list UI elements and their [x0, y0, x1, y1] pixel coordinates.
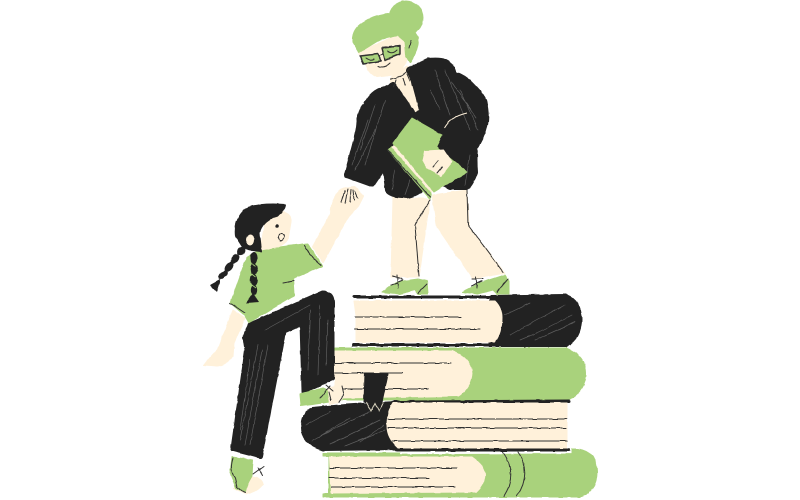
raised foot: [300, 385, 344, 406]
black jacket: [347, 61, 486, 195]
smile: [378, 63, 390, 67]
lower foot: [230, 457, 264, 494]
book 1: black cover, cream pages: [353, 295, 581, 346]
braid right: [246, 252, 259, 303]
hair: [236, 204, 285, 251]
book 3: black cover, cream pages: [302, 401, 569, 450]
green t-shirt: [230, 244, 322, 322]
fingers: [341, 189, 358, 203]
trousers: [233, 293, 332, 456]
ear: [409, 40, 411, 48]
book 2: green cover, cream pages: [335, 348, 586, 400]
ear: [246, 234, 254, 246]
hair and bun: [353, 0, 424, 62]
raised arm and hand: [313, 187, 363, 262]
book strap: [364, 373, 388, 411]
mouth: [278, 233, 284, 241]
legs: [391, 190, 505, 279]
book stack: [302, 295, 597, 497]
turtleneck lines: [390, 68, 410, 87]
eye: [275, 224, 279, 228]
woman with glasses: [347, 0, 509, 294]
lower arm: [204, 310, 245, 366]
torso and neck: [390, 66, 424, 135]
face: [358, 35, 407, 77]
book 4: green, bottom: [323, 449, 597, 497]
face: [260, 212, 291, 250]
shoes: [382, 275, 509, 294]
glasses: [360, 46, 400, 64]
green book under arm: [388, 118, 467, 199]
braid left: [210, 245, 247, 292]
hand on book: [423, 150, 452, 176]
girl climbing: [204, 187, 363, 494]
